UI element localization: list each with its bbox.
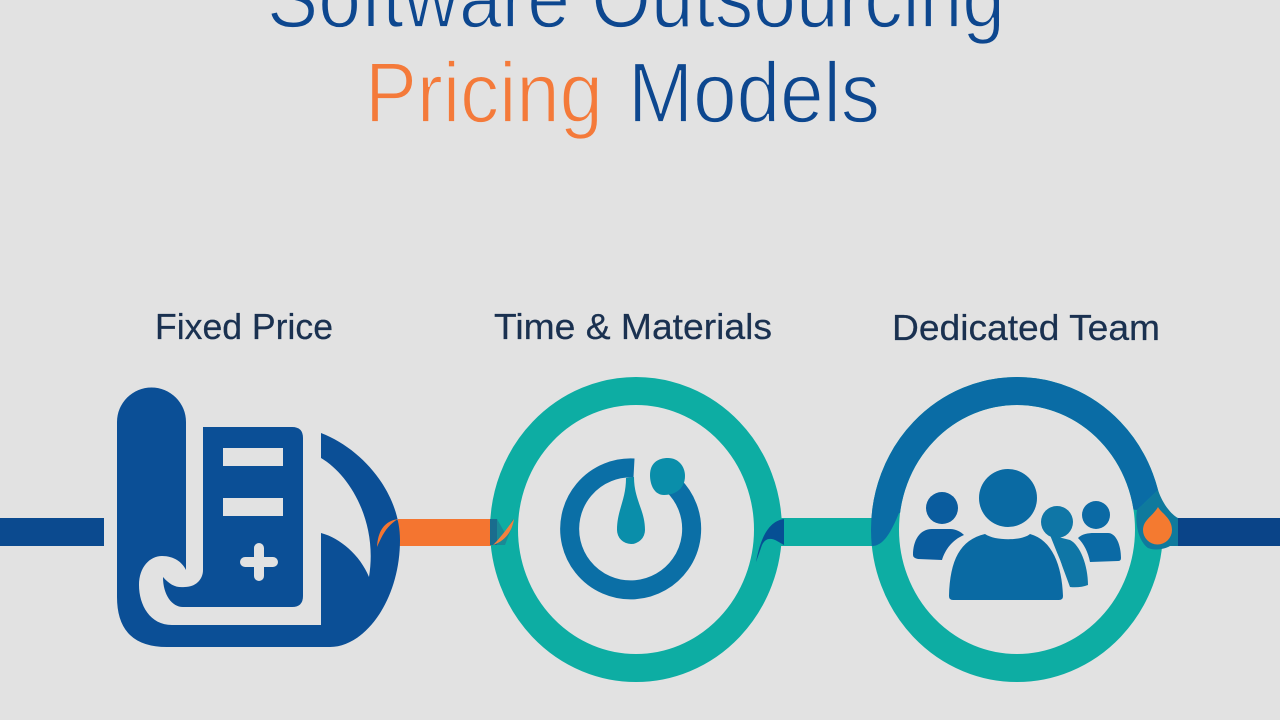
title: Pricing bbox=[365, 46, 603, 141]
label: Time & Materials: Time & Materials bbox=[494, 306, 772, 347]
label: Fixed Price: Fixed Price bbox=[155, 306, 333, 347]
icon: time and materials ring bbox=[490, 391, 784, 668]
connector: orange bar bbox=[398, 519, 492, 546]
connector: teal bar bbox=[780, 518, 874, 546]
connector: right navy bar bbox=[1170, 518, 1280, 546]
title: Models bbox=[628, 46, 880, 141]
label: Dedicated Team: Dedicated Team bbox=[892, 307, 1160, 348]
title bbox=[267, 0, 1005, 141]
icon: team of people bbox=[913, 467, 1121, 602]
icon: orange drop bbox=[1136, 490, 1178, 549]
icon: clock bbox=[570, 458, 692, 590]
icon: dedicated team ring bbox=[885, 391, 1178, 668]
icon: fixed price document bbox=[117, 380, 400, 647]
connector: left navy bar bbox=[0, 518, 104, 546]
